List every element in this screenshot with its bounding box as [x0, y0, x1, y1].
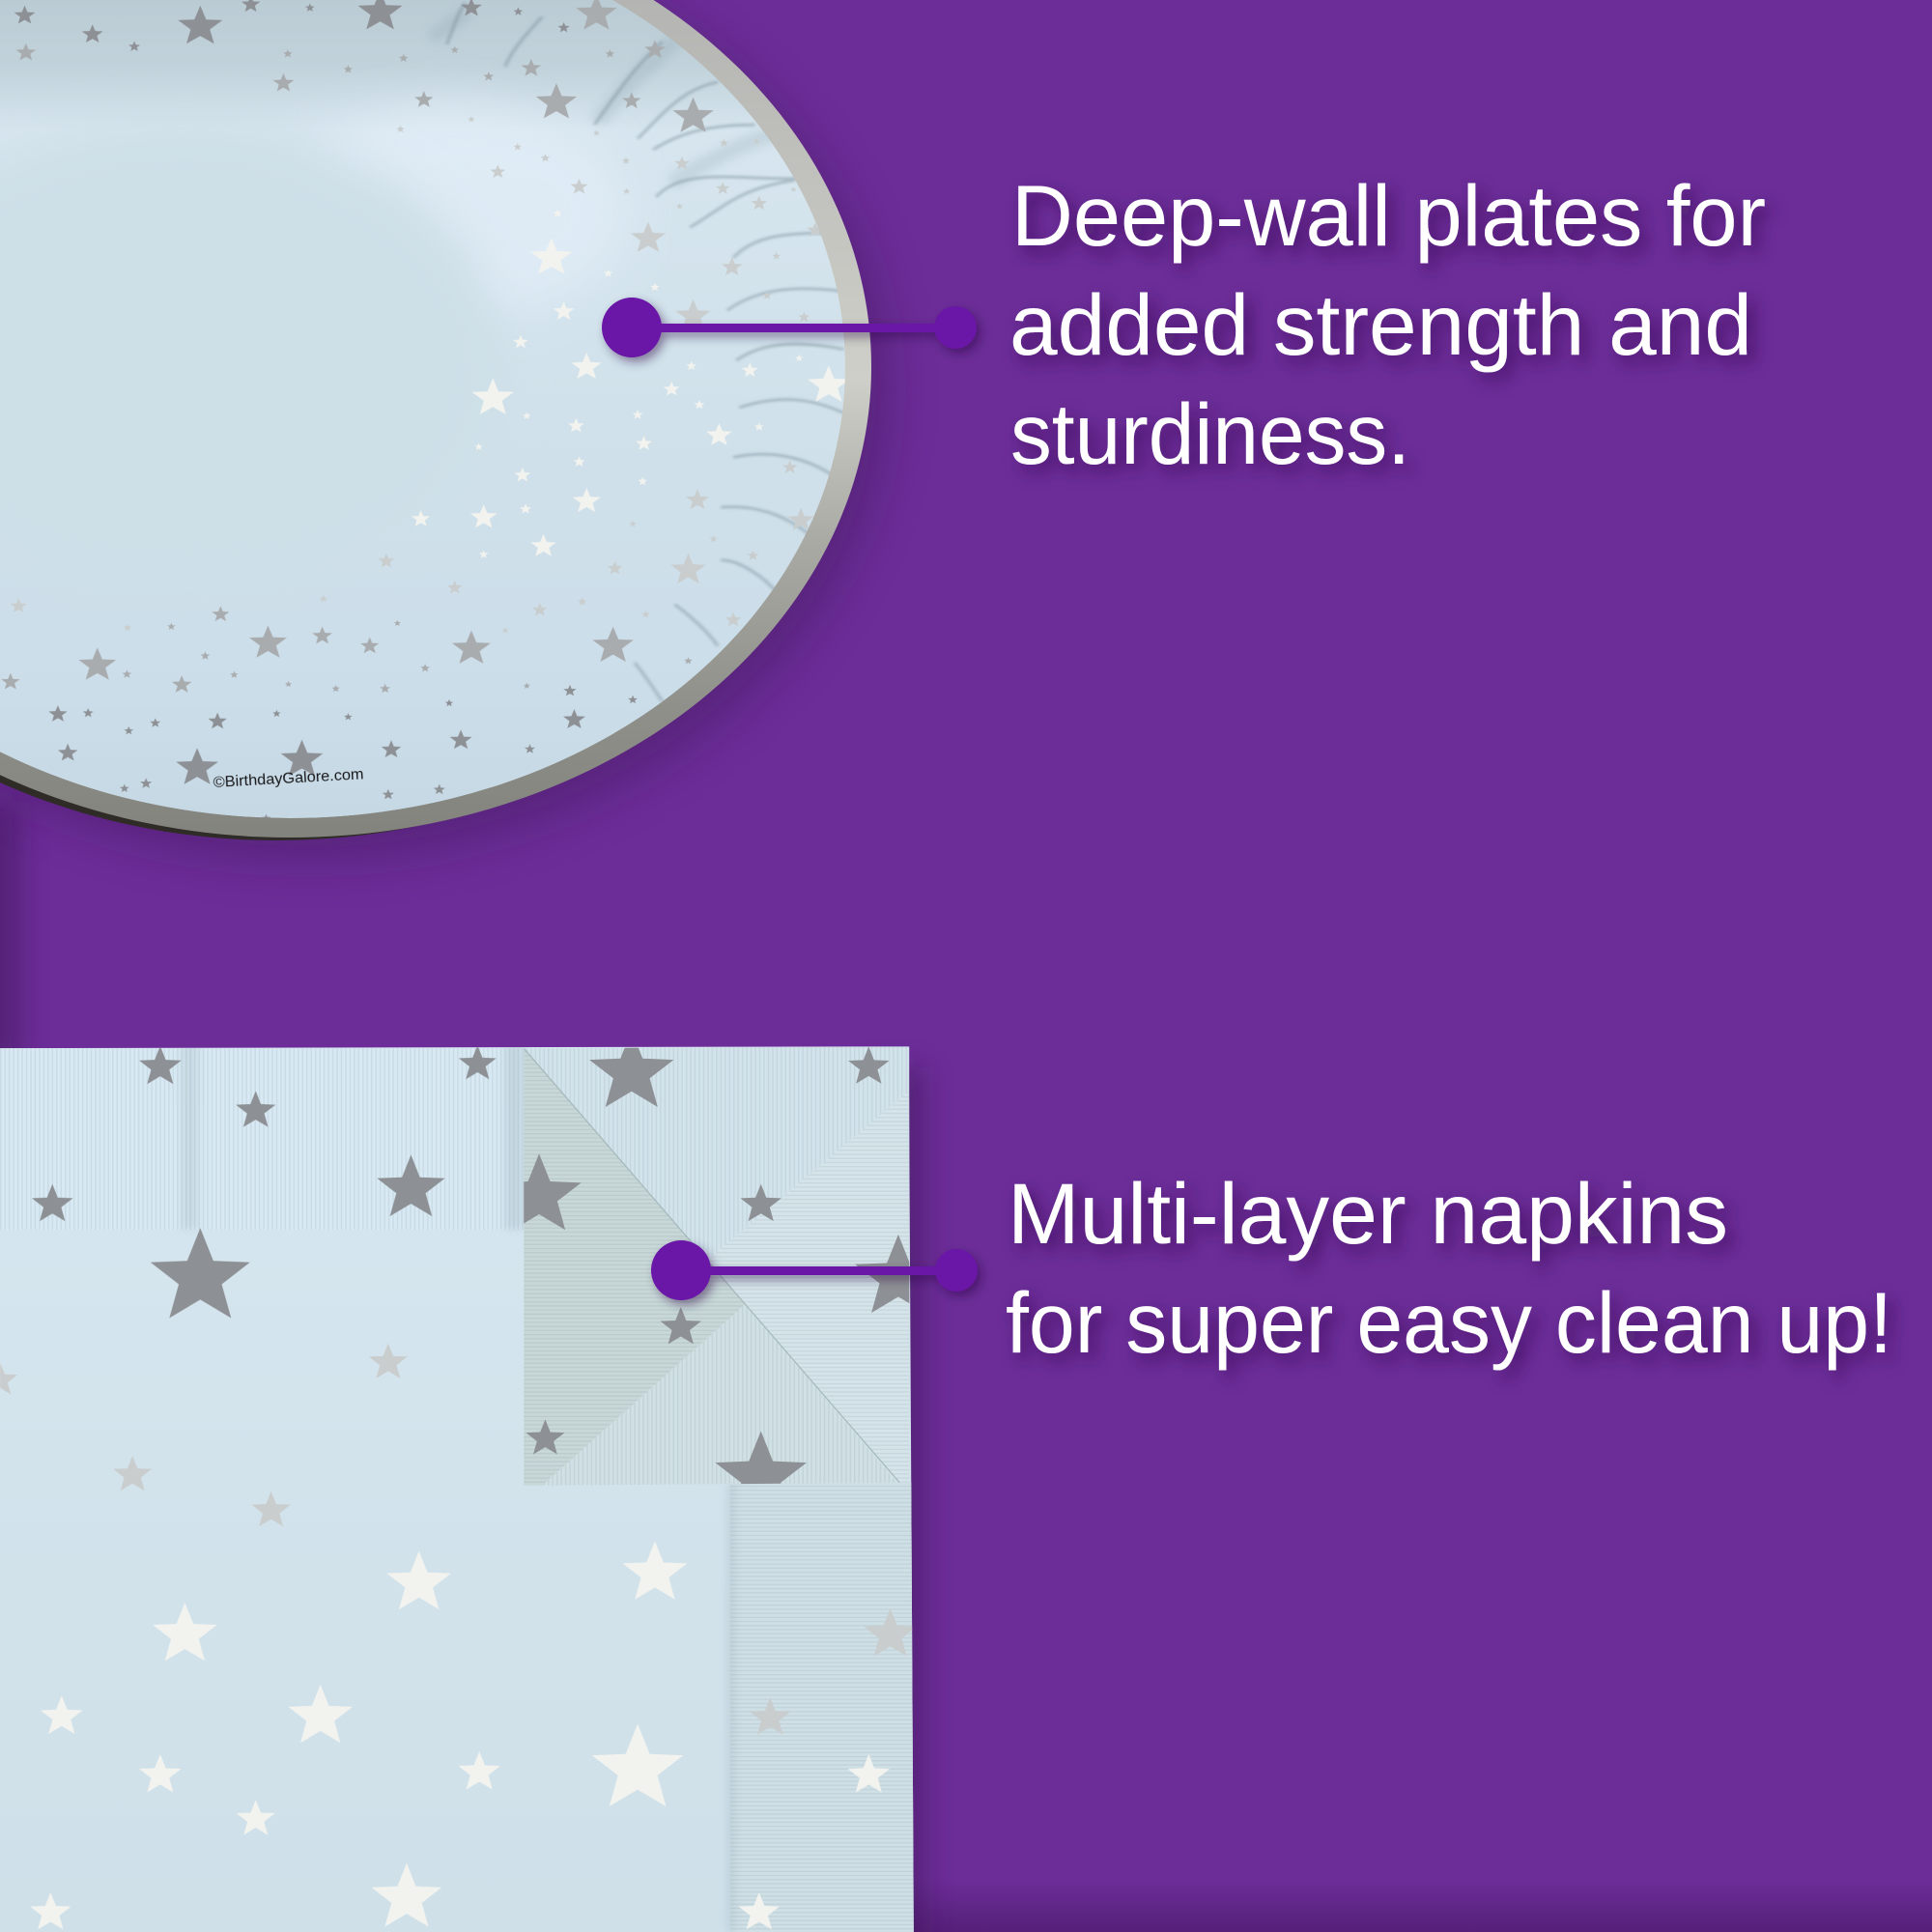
text block: plate callout: Deep-wall plates for [1011, 167, 1766, 264]
napkin stars [0, 1045, 917, 1929]
text block: napkin callout: Multi-layer napkins [1008, 1165, 1728, 1262]
plate wall soft folds [431, 11, 777, 183]
napkin body [0, 1031, 942, 1932]
napkin folded corner [524, 1047, 910, 1486]
panel: paper plate [0, 0, 891, 862]
plate surface [0, 0, 850, 822]
plate wall wrinkles [446, 3, 844, 701]
text block: napkin callout [1006, 1165, 1892, 1371]
text block: plate callout: added strength and [1009, 276, 1752, 373]
text block: plate callout [1009, 167, 1766, 482]
plate dark underside [0, 0, 848, 840]
callout: napkin pointer [651, 1240, 978, 1300]
text block: plate callout: sturdiness. [1010, 385, 1410, 482]
napkin right embossed band [727, 1483, 915, 1932]
plate silver rim [0, 0, 871, 838]
plate stars [1, 0, 850, 822]
text block: napkin callout: for super easy clean up! [1006, 1274, 1892, 1371]
callout: plate pointer [602, 298, 977, 357]
plate shadow [0, 0, 891, 862]
panel: napkin [0, 1031, 942, 1932]
plate copyright text: ©BirthdayGalore.com [213, 766, 364, 791]
napkin top embossed band [0, 1043, 530, 1230]
napkin shadow [874, 1067, 924, 1932]
